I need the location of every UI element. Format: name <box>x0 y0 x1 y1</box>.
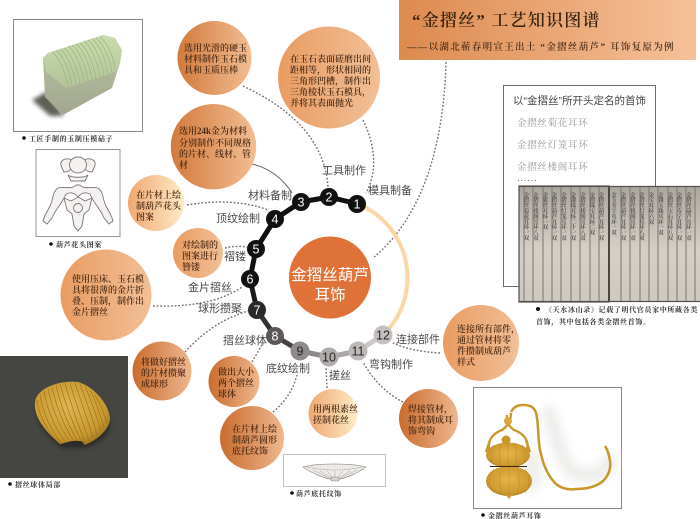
panel: jewellery named with 金摺丝 <box>504 86 656 286</box>
bubble: openwork: 图案进行 <box>182 250 218 261</box>
connector: step 5 filigree <box>225 246 247 248</box>
panel: jewellery named with 金摺丝: 金摺丝楼阁耳环 <box>517 161 588 173</box>
bubble: hook: 将其制成耳 <box>408 414 453 425</box>
bubble: two spheres: 做出大小 <box>218 366 255 377</box>
connector: step 11 hook <box>363 362 403 402</box>
bubble: pleating gold sheet: 叠、压制，制作出 <box>72 295 144 307</box>
step labels: 模具制备 <box>368 183 412 197</box>
bubble: grooved mould: 三角形凹槽，制作出 <box>290 75 371 87</box>
bubble: joining parts: 件攒制成葫芦 <box>457 345 511 356</box>
line art: gourd base pattern <box>284 454 386 486</box>
step labels: 褶镂 <box>224 249 246 263</box>
book page photo: Tianshui Bingshan Lu: 金摺丝寿字耳环一双 <box>676 191 682 242</box>
bubble: joining parts: 通过管材将零 <box>457 334 511 345</box>
panel: jewellery named with 金摺丝: 金摺丝灯笼耳环 <box>517 139 588 151</box>
connector: step 1 mould making <box>363 120 374 193</box>
photo: pleated gold ball <box>0 356 128 478</box>
bubble: two spheres <box>208 356 260 407</box>
step labels: 底纹绘制 <box>266 361 310 375</box>
step nodes: 3 <box>298 196 305 210</box>
step labels: 工具制作 <box>322 164 366 177</box>
connector: step 6 pleating <box>153 287 242 306</box>
book page photo: Tianshui Bingshan Lu: 金摺丝菊花耳环一双 <box>522 191 529 242</box>
bubble: 24k gold material <box>171 104 256 189</box>
bubble: joining parts: 连接所有部件， <box>457 323 520 335</box>
step labels: 连接部件 <box>396 332 440 346</box>
centre circle <box>289 236 371 318</box>
bubble: 24k gold material: 分别制作不同规格 <box>179 137 251 148</box>
book page photo: Tianshui Bingshan Lu: 金摺丝宝石耳环八双 <box>666 191 673 242</box>
step labels: 材料备制 <box>248 188 292 202</box>
step nodes: 8 <box>272 330 279 344</box>
bubble: hook <box>399 389 458 448</box>
title banner: “金摺丝” 工艺知识图谱 <box>412 11 601 30</box>
bubble: twisting wire: 用两根素丝 <box>313 403 358 414</box>
bubble: pleating gold sheet: 具将很薄的金片折 <box>72 284 144 295</box>
bubble: two spheres: 两个摺丝 <box>218 377 254 388</box>
caption: book: 《天水冰山录》记载了明代官员家中所藏各类 <box>545 305 698 314</box>
bubble: joining parts: 样式 <box>457 356 475 367</box>
connector: title to centre <box>373 62 446 258</box>
bubble: grooved mould: 并将其表面抛光 <box>290 97 353 108</box>
photo: gold gourd earring <box>474 388 622 508</box>
book page photo: Tianshui Bingshan Lu: 金摺丝楼阁耳环一双 <box>629 191 636 242</box>
bubble: jade mould material: 选用光滑的硬玉 <box>184 42 247 53</box>
step labels: 搓丝 <box>329 368 351 382</box>
connector: step 8 pleated ball <box>252 343 263 362</box>
step nodes: 7 <box>254 304 261 318</box>
bubble: base pattern: 底托纹饰 <box>232 445 268 456</box>
bubble: grooved mould <box>278 26 380 128</box>
bubble: base pattern: 制葫芦圆形 <box>232 434 277 445</box>
panel: jewellery named with 金摺丝: 以“金摺丝”所开头定名的首饰 <box>513 94 646 107</box>
step nodes: 12 <box>376 328 390 342</box>
bubble: openwork <box>173 228 223 278</box>
bubble: form into ball: 的片材攒聚 <box>141 367 186 378</box>
book page photo: Tianshui Bingshan Lu: 金摺丝葫芦耳环一双 <box>685 191 692 242</box>
bubble: form into ball: 将做好摺丝 <box>141 356 186 367</box>
step nodes: 11 <box>352 344 365 358</box>
step labels: 摺丝球体 <box>223 333 267 347</box>
bubble: jade mould material: 具和玉质压棒 <box>184 64 238 75</box>
book page photo: Tianshui Bingshan Lu: 金摺丝葫芦耳环一双 <box>598 191 604 242</box>
caption: book <box>536 305 698 327</box>
book page photo: Tianshui Bingshan Lu: 金宝耳环六双 <box>648 191 654 226</box>
centre circle: 耳饰 <box>314 286 346 304</box>
bubble: openwork: 簪镂 <box>182 261 201 272</box>
caption: book: 首饰，其中包括各类金摺丝首饰。 <box>536 317 651 327</box>
step labels: 弯钩制作 <box>369 357 413 371</box>
title banner: ——以湖北蕲春明宣王出土 “金摺丝葫芦” 耳饰复原为例 <box>406 41 675 53</box>
bubble: grooved mould: 在玉石表面磋磨出间 <box>290 53 371 64</box>
bubble: two spheres: 球体 <box>218 388 236 399</box>
centre circle: 金摺丝葫芦 <box>291 266 369 284</box>
caption: jade mould: 工匠手制的玉制压模砧子 <box>29 134 113 143</box>
bubble: 24k gold material: 材 <box>179 159 188 170</box>
connector: step 2 tool making <box>243 86 328 187</box>
step nodes: 1 <box>354 198 361 212</box>
connector: step 9 base pattern <box>273 375 297 412</box>
book page photo: Tianshui Bingshan Lu: 金玉寿字耳环一双 <box>610 191 617 237</box>
bubble: joining parts <box>443 305 520 381</box>
bubble: jade mould material: 材料制作玉石模 <box>184 53 247 64</box>
bubble: form into ball <box>132 342 192 400</box>
panel: jewellery named with 金摺丝: …… <box>517 174 537 184</box>
book page photo: Tianshui Bingshan Lu <box>519 186 700 302</box>
book page photo: Tianshui Bingshan Lu: 金摺丝楼阁耳环八双 <box>579 191 586 242</box>
bubble: grooved mould: 距相等，形状相同的 <box>290 64 371 76</box>
bubble: draw flower pattern: 在片材上绘 <box>136 189 182 200</box>
process ring <box>250 197 407 357</box>
bubble: jade mould material <box>178 21 252 95</box>
bubble: draw flower pattern: 制葫芦花头 <box>136 200 182 211</box>
connector: step 4 pattern <box>187 202 268 210</box>
step labels: 球形攒聚 <box>198 301 242 315</box>
step nodes: 2 <box>326 190 333 204</box>
connector: step 3 materials <box>252 164 292 193</box>
bubble: hook: 焊接管材， <box>407 403 453 415</box>
line art: gourd flower head <box>36 150 120 236</box>
bubble: grooved mould: 三角棱状玉石模具， <box>290 86 371 98</box>
bubble: openwork: 对绘制的 <box>182 239 218 250</box>
bubble: draw flower pattern: 图案 <box>136 212 154 222</box>
book page photo: Tianshui Bingshan Lu: 金摺珠宝耳环二双 <box>588 191 595 237</box>
book page photo: Tianshui Bingshan Lu: 金摺丝葫芦耳环一双 <box>620 191 626 242</box>
book page photo: Tianshui Bingshan Lu: 金镶珠耳环二十一双 <box>570 191 576 242</box>
book page photo: Tianshui Bingshan Lu: 金摺丝葫芦耳环一双 <box>550 191 557 242</box>
bubble: twisting wire: 搓制花丝 <box>313 414 349 425</box>
title banner <box>399 0 696 60</box>
bubble: pleating gold sheet: 金片摺丝 <box>72 306 108 317</box>
bubble: 24k gold material: 的片材、线材、管 <box>179 148 251 159</box>
step nodes: 10 <box>322 350 336 364</box>
caption: gold ball detail: 摺丝球体局部 <box>15 480 61 489</box>
bubble: twisting wire <box>308 389 358 438</box>
connector: step 12 joining <box>393 343 440 353</box>
step labels: 顶纹绘制 <box>216 211 260 225</box>
bubble: base pattern: 在片材上绘 <box>232 423 278 434</box>
book page photo: Tianshui Bingshan Lu: 金摺丝灯笼耳环一双 <box>560 191 568 242</box>
photo: jade press mould <box>14 20 142 132</box>
step nodes: 5 <box>253 242 260 256</box>
bubble: base pattern <box>220 406 284 470</box>
book page photo: Tianshui Bingshan Lu: 金累丝耳环一双 <box>542 191 548 231</box>
step labels <box>188 164 440 382</box>
book page photo: Tianshui Bingshan Lu: 金摺丝楼阁耳环八双 <box>532 191 539 242</box>
step nodes: 6 <box>247 272 254 286</box>
step nodes <box>241 188 392 366</box>
panel: jewellery named with 金摺丝: 金摺丝菊花耳环 <box>517 117 588 129</box>
step nodes: 4 <box>272 212 279 226</box>
bubble: 24k gold material: 选用24k金为材料 <box>179 125 247 136</box>
connector: step 10 twisted wire <box>326 367 327 388</box>
bubble: form into ball: 成球形 <box>141 378 168 389</box>
book page photo: Tianshui Bingshan Lu: 金摺丝灯笼耳环八双 <box>638 191 646 242</box>
connector: step 7 gathering <box>185 311 248 352</box>
bubble: hook: 饰弯钩 <box>408 425 435 436</box>
step nodes: 9 <box>297 344 304 358</box>
bubble: pleating gold sheet: 使用压床、玉石模 <box>72 273 144 284</box>
bubble: draw flower pattern <box>128 175 184 231</box>
book page photo: Tianshui Bingshan Lu: 金镶玉珠耳环一双 <box>657 191 664 237</box>
caption: flower head: 葫芦花头图案 <box>56 240 102 249</box>
caption: base pattern: 葫芦底托纹饰 <box>296 489 342 498</box>
bubble: pleating gold sheet <box>60 250 152 340</box>
step labels: 金片摺丝 <box>188 280 232 294</box>
